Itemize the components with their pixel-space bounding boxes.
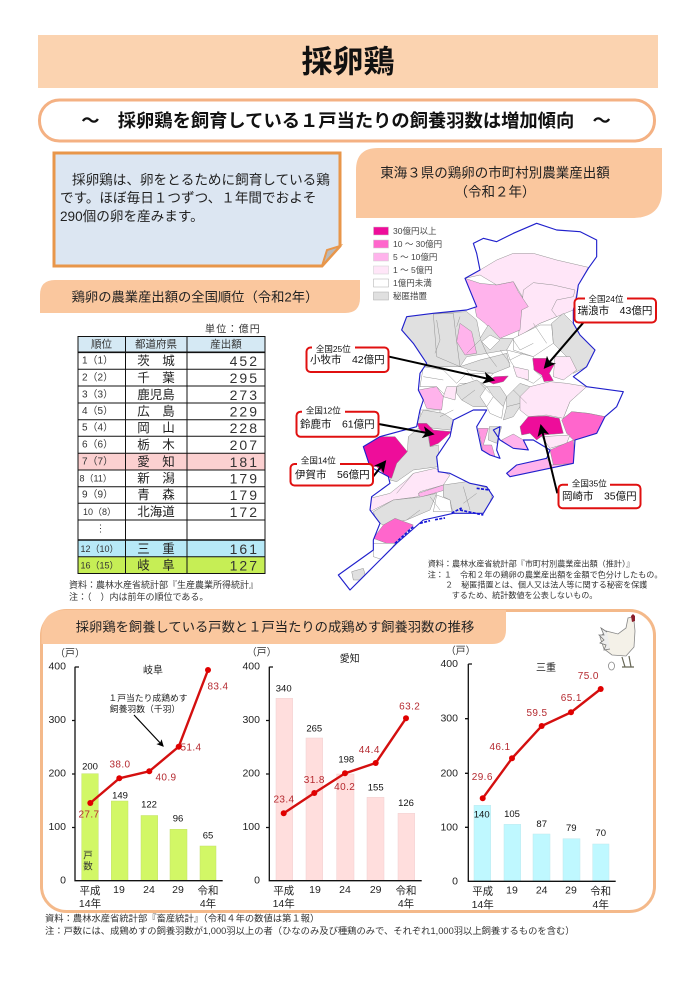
table: national ranking: 栃 木	[137, 438, 175, 452]
chart: Mie: 400	[440, 658, 458, 670]
chart: Aichi: 14年	[273, 897, 295, 910]
Mie bars	[474, 805, 609, 881]
chart: Aichi: 100	[242, 821, 260, 833]
chart: Gifu: 令和	[198, 884, 218, 897]
chart: Aichi: 126	[398, 798, 414, 809]
table: national ranking: 都道府県	[135, 338, 177, 350]
table: national ranking: 鹿児島	[137, 387, 175, 402]
chart: Gifu: 149	[112, 790, 128, 802]
map legend: 1 ～ 5億円	[393, 265, 433, 275]
chart: Aichi: 19	[309, 884, 321, 896]
map source notes: 資料：農林水産省統計部『市町村別農業産出額（推計）』	[428, 558, 634, 568]
table: national ranking: 茨 城	[137, 354, 175, 368]
table: national ranking: 愛 知	[137, 455, 175, 469]
chart: Gifu: 24	[143, 884, 155, 896]
table: national ranking: 新 潟	[137, 472, 175, 486]
footer source notes: 資料：農林水産省統計部『畜産統計』（令和４年の数値は第１報）	[45, 912, 319, 924]
table: national ranking: 7（7）	[82, 456, 113, 468]
table unit: 単位：億円	[205, 322, 261, 336]
table: national ranking: 産出額	[210, 338, 242, 350]
chart: Mie: 令和	[590, 885, 611, 898]
heading: map	[356, 148, 662, 218]
chart: Aichi: 300	[242, 714, 260, 726]
table: national ranking: 広 島	[137, 404, 175, 418]
chart: Mie	[440, 645, 616, 911]
table: national ranking: 6（6）	[82, 438, 113, 450]
map legend: 5 ～ 10億円	[393, 252, 437, 262]
chart: Mie: 29.6	[472, 772, 493, 783]
chart: Mie: 46.1	[489, 742, 511, 753]
table: national ranking: 12（10）	[80, 544, 119, 554]
callout: Okazaki: 全国35位	[572, 478, 607, 488]
chart: Aichi: 40.2	[334, 782, 355, 793]
map source notes: 注：１ 令和２年の鶏卵の農業産出額を金額で色分けしたもの。	[428, 570, 662, 580]
heading: map: 東海３県の鶏卵の市町村別農業産出額	[380, 166, 610, 180]
callout: Mizunami: 瑞浪市 43億円	[578, 304, 652, 317]
chart: Aichi: 愛知	[340, 652, 360, 665]
callout: Komaki	[306, 344, 388, 372]
table: national ranking: 2（2）	[82, 372, 113, 384]
table: national ranking: 1（1）	[82, 354, 113, 366]
table: national ranking: 9（9）	[82, 488, 113, 500]
chart: Aichi: 24	[339, 884, 351, 896]
table: national ranking: 228	[230, 420, 259, 436]
chart: Gifu: 400	[48, 660, 66, 672]
chart: Gifu: 飼養羽数（千羽）	[110, 703, 180, 714]
map legend: 秘匿措置	[393, 291, 428, 301]
chart: Mie: 19	[506, 884, 518, 896]
chart: Gifu: 51.4	[180, 742, 202, 754]
callout: Iga: 伊賀市 56億円	[295, 468, 370, 481]
chart: Aichi: 265	[306, 724, 322, 734]
footer source notes: 注：戸数には、成鶏めすの飼養羽数が1,000羽以上の者（ひなのみ及び種鶏のみで、それぞれ1,000羽以上飼養するものを含む）	[45, 925, 575, 936]
table: national ranking: 207	[230, 437, 259, 453]
chart: Aichi: 400	[242, 660, 260, 672]
chart: Aichi: 200	[242, 768, 260, 780]
callout: Iga: 全国14位	[301, 456, 336, 466]
table: national ranking: 10（8）	[83, 507, 116, 517]
table: national ranking: 161	[230, 541, 259, 557]
arrow: Okazaki	[541, 426, 557, 493]
chart: Gifu: 19	[113, 884, 125, 896]
map source notes	[428, 558, 662, 600]
chart: Mie: 14年	[472, 898, 494, 911]
chart: Gifu: 平成	[80, 885, 101, 897]
chart: Gifu: 岐阜	[143, 664, 163, 676]
table: national ranking: 4（5）	[82, 405, 113, 417]
chart: Gifu: 100	[48, 821, 66, 833]
title	[38, 35, 658, 88]
panel: trend charts	[42, 610, 654, 912]
heading: national ranking: 鶏卵の農業産出額の全国順位（令和2年）	[72, 290, 318, 304]
callout: Komaki: 小牧市 42億円	[310, 353, 385, 366]
table: national ranking: 127	[230, 558, 259, 574]
chart: Gifu: 96	[173, 814, 183, 824]
chart: Gifu: 65	[203, 830, 213, 842]
map: Tokai three prefectures	[330, 217, 630, 597]
text box: description: 採卵鶏は、卵をとるために飼育している鶏	[72, 172, 330, 188]
table: national ranking: 181	[230, 454, 259, 470]
chart: Gifu: 14年	[79, 897, 101, 910]
arrow: Komaki	[389, 357, 493, 380]
table: national ranking: 岐 阜	[137, 558, 175, 572]
callout: Okazaki	[558, 478, 640, 508]
chart: Aichi: 23.4	[273, 794, 295, 806]
chart: Gifu: （戸）	[55, 648, 85, 660]
table: national ranking: 5（4）	[82, 422, 113, 434]
callout: Iga	[290, 456, 373, 486]
chart: Aichi: 0	[254, 874, 260, 886]
chart: Mie: 300	[440, 713, 458, 725]
chart: Aichi: 平成	[273, 885, 295, 897]
chart: Mie: 79	[566, 823, 577, 834]
chart: Aichi: 4年	[398, 897, 414, 910]
arrow: Suzuka	[379, 424, 433, 434]
table: national ranking: 452	[230, 353, 259, 369]
chart: Gifu: 4年	[200, 897, 216, 910]
text box: description	[54, 153, 340, 266]
chart: Gifu: 200	[48, 768, 66, 780]
arrow: Iga	[372, 462, 385, 478]
subtitle banner	[40, 100, 654, 141]
title: 採卵鶏	[302, 44, 394, 80]
arrow: Mizunami	[545, 323, 583, 367]
chart: Aichi: （戸）	[247, 646, 277, 658]
chart: Mie: 87	[536, 819, 547, 830]
chart: Aichi: 155	[368, 782, 384, 794]
chart: Gifu: 40.9	[155, 772, 177, 784]
footer source notes	[45, 912, 575, 936]
chart: Gifu: 200	[82, 762, 98, 772]
chart: Mie: 29	[565, 884, 577, 896]
chart: Aichi: 44.4	[359, 745, 380, 756]
table source notes: 注：（ ）内は前年の順位である。	[69, 591, 208, 602]
table: national ranking: 172	[230, 504, 259, 520]
table source notes: 資料：農林水産省統計部『生産農業所得統計』	[69, 579, 258, 590]
chart: Mie: 100	[440, 821, 458, 833]
text box: description: 290個の卵を産みます。	[60, 209, 204, 224]
table: national ranking: 北海道	[137, 504, 175, 519]
chart: Aichi: 令和	[396, 884, 416, 897]
table: national ranking	[78, 336, 265, 574]
chart: Gifu: 数	[83, 860, 93, 872]
chart: Mie: 平成	[472, 886, 494, 898]
chart: Gifu	[48, 648, 229, 910]
table: national ranking: ⋮	[96, 524, 106, 534]
chart: Mie: （戸）	[446, 645, 476, 657]
chart: Aichi: 29	[370, 884, 382, 896]
table: national ranking: 179	[230, 470, 259, 486]
callout: Mizunami: 全国24位	[589, 294, 624, 304]
chart: Aichi: 63.2	[399, 702, 420, 712]
Gifu bars	[82, 774, 216, 881]
table: national ranking: 295	[230, 370, 259, 386]
icon: hen and egg	[599, 614, 635, 670]
table: national ranking: 273	[230, 387, 259, 403]
table: national ranking: 岡 山	[137, 421, 175, 435]
map legend: 10 ～ 30億円	[393, 239, 442, 249]
chart: Gifu: 38.0	[109, 760, 131, 770]
map source notes: するため、統計数値を公表しないもの。	[452, 590, 597, 600]
chart: Aichi: 31.8	[304, 775, 325, 786]
callout: Komaki: 全国25位	[316, 344, 351, 354]
heading: map: （令和２年）	[454, 184, 536, 200]
chart: Mie: 75.0	[578, 671, 599, 682]
table: national ranking: 8（11）	[80, 474, 112, 484]
chart: Gifu: 83.4	[207, 682, 229, 692]
chart: Mie: 200	[440, 767, 458, 779]
Aichi bars	[276, 698, 415, 881]
chart: Aichi	[242, 646, 422, 910]
callout: Mizunami	[574, 294, 656, 322]
table: national ranking: 青 森	[137, 487, 175, 502]
chart: Mie: 24	[536, 884, 548, 896]
table: national ranking: 16（15）	[80, 560, 119, 570]
chart: Gifu: 27.7	[78, 810, 100, 820]
panel: trend charts: 採卵鶏を飼養している戸数と１戸当たりの成鶏めす飼養羽数の推移	[76, 618, 474, 634]
text box: description: です。ほぼ毎日１つずつ、１年間でおよそ	[60, 190, 316, 206]
table: national ranking: 229	[230, 404, 259, 420]
chart: Aichi: 340	[276, 684, 292, 694]
chart: Mie: 65.1	[561, 693, 582, 704]
chart: Gifu: 戸	[83, 850, 93, 862]
callout: Suzuka	[296, 405, 378, 437]
chart: Mie: 140	[474, 810, 490, 820]
table: national ranking: 順位	[91, 338, 112, 350]
map legend: 1億円未満	[393, 278, 432, 288]
table source notes	[69, 579, 258, 602]
chart: Mie: 4年	[593, 898, 609, 911]
chart: Gifu: １戸当たり成鶏めす	[108, 692, 188, 703]
map legend	[374, 226, 442, 301]
chart: Mie: 70	[595, 828, 606, 839]
callout: Suzuka: 鈴鹿市 61億円	[300, 418, 375, 431]
table: national ranking: 千 葉	[137, 371, 175, 385]
subtitle banner: ～ 採卵鶏を飼育している１戸当たりの飼養羽数は増加傾向 ～	[81, 110, 611, 131]
chart: Gifu: 122	[141, 800, 157, 810]
heading: national ranking	[40, 280, 360, 313]
chart: Gifu: 29	[172, 884, 184, 896]
table: national ranking: 3（3）	[82, 388, 113, 400]
chart: Gifu: 0	[60, 874, 66, 886]
chart: Mie: 105	[504, 809, 520, 820]
callout: Suzuka: 全国12位	[306, 405, 341, 415]
chart: Mie: 0	[452, 875, 458, 887]
chart: Mie: 59.5	[526, 708, 548, 719]
chart: Aichi: 198	[338, 754, 354, 766]
map legend: 30億円以上	[393, 226, 437, 236]
table: national ranking: 179	[230, 487, 259, 503]
map source notes: ２ 秘匿措置とは、個人又は法人等に関する秘密を保護	[445, 580, 647, 590]
table: national ranking: 三 重	[137, 541, 175, 556]
callout: Okazaki: 岡崎市 35億円	[562, 490, 637, 503]
chart: Gifu: 300	[48, 714, 66, 726]
chart: Mie: 三重	[536, 661, 556, 674]
